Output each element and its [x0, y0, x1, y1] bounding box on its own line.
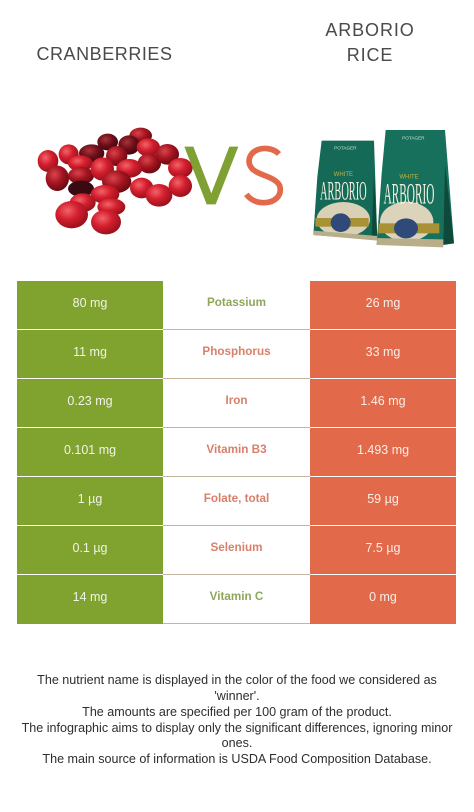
image: arborio rice bags: ARBORIO: [320, 175, 367, 205]
row: vitamin b3: Vitamin B3: [206, 443, 267, 456]
row: iron: 0.23 mg: [67, 394, 113, 408]
row: iron: [17, 379, 456, 427]
row: selenium: Selenium: [211, 541, 262, 554]
row: vitamin b3: 1.493 mg: [357, 443, 409, 457]
title: arborio rice: RICE: [347, 45, 393, 65]
row: folate: [17, 477, 456, 525]
bag: left: [313, 141, 377, 241]
title: cranberries: CRANBERRIES: [36, 44, 173, 64]
row: vitamin b3: [17, 428, 456, 476]
row: selenium: 7.5 µg: [365, 541, 400, 555]
row: folate: 59 µg: [367, 492, 399, 506]
row: selenium: 0.1 µg: [72, 541, 108, 555]
footnote text: 'winner'.: [214, 689, 260, 703]
vs: letter V: [184, 146, 238, 204]
footnote text: ones.: [222, 736, 252, 750]
comparison table: [17, 281, 456, 624]
row: vitamin c: 14 mg: [73, 590, 107, 604]
footnote text: [22, 673, 452, 766]
title: arborio rice: ARBORIO: [325, 20, 415, 40]
row: vitamin c: [17, 575, 456, 624]
row: phosphorus: [17, 330, 456, 378]
footnote text: The main source of information is USDA Food Composition Database.: [42, 752, 432, 766]
row: iron: 1.46 mg: [360, 394, 406, 408]
row: potassium: 80 mg: [73, 296, 107, 310]
row: potassium: [17, 281, 456, 329]
row: vitamin c: 0 mg: [369, 590, 397, 604]
row: selenium: [17, 526, 456, 574]
bag: left: WHITE: [334, 172, 353, 178]
row: folate: 1 µg: [78, 492, 102, 506]
image: cranberries: [38, 128, 193, 234]
row: vitamin c: Vitamin C: [210, 590, 263, 603]
title: arborio rice: [325, 20, 415, 65]
row: vitamin b3: 0.101 mg: [64, 443, 116, 457]
row: phosphorus: 11 mg: [73, 345, 107, 359]
bag: left: POTAGER: [334, 145, 357, 150]
bag: right: WHITE: [399, 174, 419, 180]
row: potassium: Potassium: [207, 296, 266, 309]
row: phosphorus: Phosphorus: [202, 345, 271, 358]
bag: right: [377, 130, 454, 247]
row: potassium: 26 mg: [366, 296, 400, 310]
vs: letter S: [244, 146, 284, 206]
footnote text: The infographic aims to display only the significant differences, ignoring minor: [22, 721, 452, 735]
bag: right: POTAGER: [402, 135, 425, 140]
image: arborio rice bags: [313, 130, 454, 248]
footnote text: The nutrient name is displayed in the color of the food we considered as: [37, 673, 437, 687]
footnote text: The amounts are specified per 100 gram of the product.: [82, 705, 392, 719]
row: folate: Folate, total: [204, 492, 269, 505]
row: phosphorus: 33 mg: [366, 345, 400, 359]
row: iron: Iron: [225, 394, 248, 407]
